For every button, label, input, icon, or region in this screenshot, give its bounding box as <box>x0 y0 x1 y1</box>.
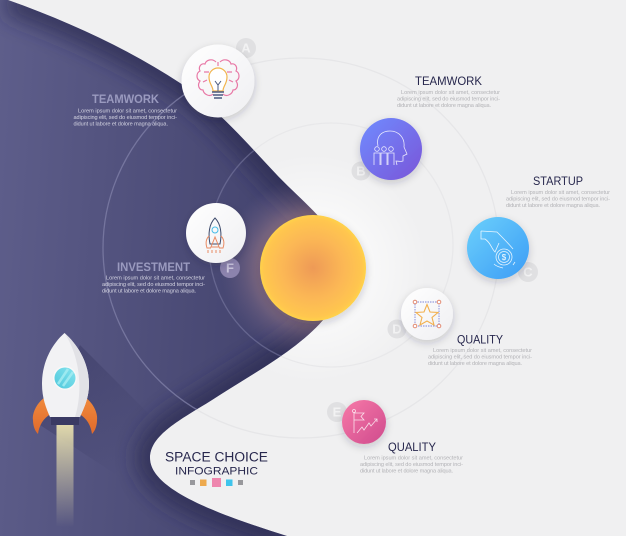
letter badge D <box>388 320 406 338</box>
body C: Lorem ipsum dolor sit amet, consectetur <box>511 190 610 196</box>
node F: rocket icon <box>186 203 246 263</box>
sun <box>260 215 366 321</box>
title colour squares <box>190 478 243 487</box>
letter badge A: A <box>241 40 251 56</box>
rocket body <box>42 333 89 417</box>
rocket under-band <box>51 416 79 425</box>
letter badge D: D <box>392 322 402 336</box>
rocket <box>32 333 112 521</box>
orbits on dark panel <box>102 94 281 410</box>
letter badge B <box>352 162 370 180</box>
body B <box>397 90 500 109</box>
body D <box>428 348 532 367</box>
heading D: QUALITY <box>457 334 503 346</box>
letter badge C: C <box>523 264 533 280</box>
text E <box>360 442 463 474</box>
body F: adipiscing elit, sed do eiusmod tempor inci- <box>102 282 205 288</box>
body C <box>506 190 610 209</box>
body A: didunt ut labore et dolore magna aliqua. <box>74 122 168 128</box>
node B: team head icon <box>360 118 422 180</box>
letter badge F <box>220 258 240 278</box>
body F: didunt ut labore et dolore magna aliqua. <box>102 288 196 294</box>
rocket shadow <box>40 346 112 438</box>
text B <box>397 76 500 109</box>
node D: star selection icon <box>401 288 453 340</box>
orbit: outer light <box>103 58 499 438</box>
letter badge B: B <box>356 164 366 178</box>
body C: didunt ut labore et dolore magna aliqua. <box>506 203 600 209</box>
dark panel <box>0 0 345 536</box>
orbit: inner light <box>209 123 453 367</box>
block E <box>327 400 463 474</box>
heading E: QUALITY <box>388 442 436 454</box>
body E: Lorem ipsum dolor sit amet, consectetur <box>364 456 463 462</box>
body E: didunt ut labore et dolore magna aliqua. <box>360 468 453 474</box>
light glow around sun <box>198 153 428 383</box>
heading C: STARTUP <box>533 176 583 188</box>
body E <box>360 456 463 474</box>
block F <box>102 203 246 294</box>
body B: Lorem ipsum dolor sit amet, consectetur <box>401 90 500 96</box>
node A: brain bulb icon <box>182 44 254 118</box>
heading A: TEAMWORK <box>92 94 160 106</box>
letter badge C <box>518 262 538 282</box>
text C <box>506 176 610 209</box>
sun glow on dark panel <box>232 188 323 349</box>
text F <box>102 262 205 294</box>
body E: adipiscing elit, sed do eiusmod tempor inci- <box>360 462 463 468</box>
body D: adipiscing elit, sed do eiusmod tempor inci- <box>428 354 532 360</box>
block D <box>388 288 532 367</box>
body B: adipiscing elit, sed do eiusmod tempor inci- <box>397 96 500 102</box>
body A <box>74 108 177 128</box>
body A: Lorem ipsum dolor sit amet, consectetur <box>78 108 177 114</box>
rocket exhaust trail <box>56 425 74 527</box>
block B <box>352 76 500 180</box>
body C: adipiscing elit, sed do eiusmod tempor inci- <box>506 196 610 202</box>
block A <box>74 38 256 128</box>
node C: hand coin icon: $ <box>502 253 507 262</box>
rocket fins <box>33 398 97 434</box>
rocket window <box>53 366 77 390</box>
letter badge E: E <box>333 404 342 420</box>
body A: adipiscing elit, sed do eiusmod tempor inci- <box>74 115 177 121</box>
body D: didunt ut labore et dolore magna aliqua. <box>428 361 522 367</box>
heading B: TEAMWORK <box>415 76 482 88</box>
body F: Lorem ipsum dolor sit amet, consectetur <box>106 276 205 282</box>
dark panel inner edge shade <box>8 0 345 536</box>
body B: didunt ut labore et dolore magna aliqua. <box>397 103 491 109</box>
letter badge A <box>236 38 256 58</box>
body F <box>102 276 205 294</box>
text D <box>428 334 532 367</box>
heading F: INVESTMENT <box>117 262 190 274</box>
node C: hand coin icon <box>467 217 529 279</box>
text A <box>74 94 177 128</box>
letter badge F: F <box>226 260 234 276</box>
body D: Lorem ipsum dolor sit amet, consectetur <box>433 348 532 354</box>
title: INFOGRAPHIC <box>175 466 258 478</box>
title: SPACE CHOICE <box>165 450 268 464</box>
title <box>165 450 268 487</box>
block C <box>467 176 610 282</box>
node E: flag chart icon <box>342 400 386 444</box>
